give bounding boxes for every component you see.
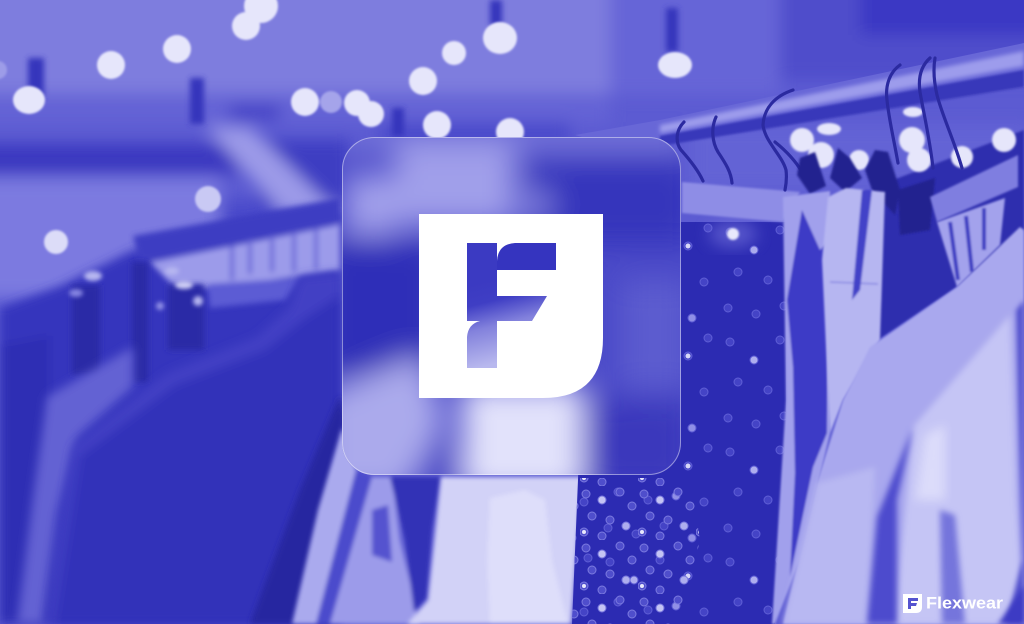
sequin dress <box>572 222 786 624</box>
F lower stem <box>467 321 497 368</box>
white shirt <box>407 477 582 624</box>
left rail and hangers <box>69 198 340 382</box>
clothes rail, right <box>575 43 1024 146</box>
sparkle glow <box>709 221 757 247</box>
dark back area, right <box>870 130 1024 345</box>
frosted glass panel <box>342 137 681 475</box>
main F logo <box>419 214 603 398</box>
brand name: Flexwear <box>926 594 1004 612</box>
dark clothing mass, left <box>0 212 340 624</box>
hanger hooks <box>677 58 962 190</box>
sheer garment <box>937 198 1005 287</box>
ceiling tones <box>0 0 1024 298</box>
light fixtures <box>28 0 678 136</box>
white blouse, lower right <box>783 227 1024 624</box>
F top arm <box>497 243 556 270</box>
dark jacket <box>47 273 340 624</box>
draped garment, right strap <box>822 188 885 433</box>
dense sequins, lower left <box>572 478 700 624</box>
dark jacket lining <box>250 395 345 624</box>
grey sweater <box>17 347 133 624</box>
right angled hanger <box>930 155 1018 222</box>
draped garment, left strap <box>772 191 830 624</box>
lavender shirt <box>292 428 441 624</box>
Flexwear wordmark <box>903 594 1004 613</box>
bokeh lights <box>0 0 1016 254</box>
F upper stem and middle arm <box>467 243 547 321</box>
hanger bar <box>682 182 800 222</box>
small logo icon <box>903 594 922 613</box>
hanger clips <box>797 148 935 235</box>
